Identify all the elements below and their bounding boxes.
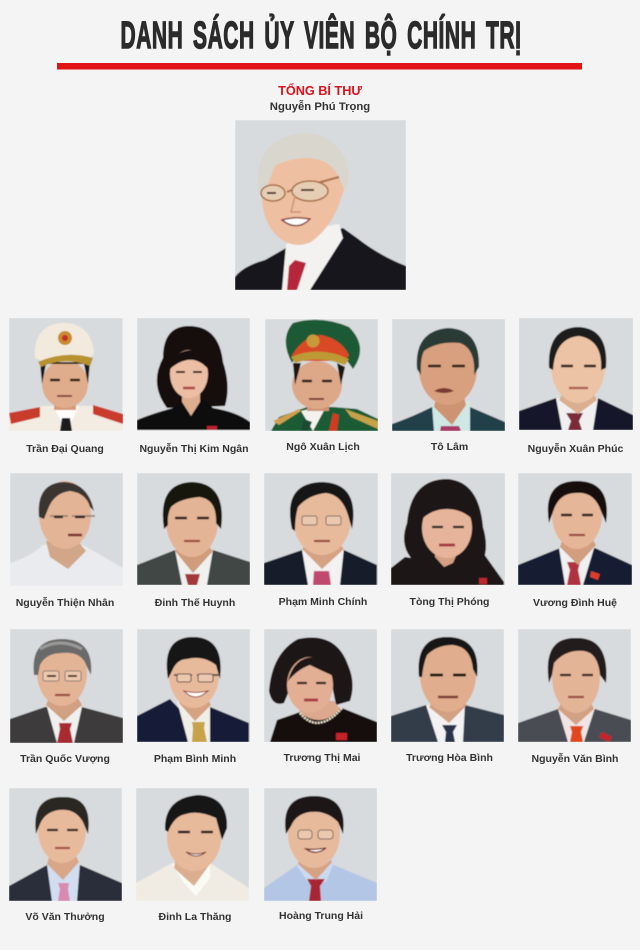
portrait: Trương Hòa Bình — [391, 629, 504, 742]
name: Phạm Minh Chính: Phạm Minh Chính — [279, 596, 367, 608]
name: Hoàng Trung Hải: Hoàng Trung Hải — [279, 910, 363, 922]
member: Nguyễn Thị Kim Ngân — [137, 318, 250, 455]
portrait: Nguyễn Văn Bình — [518, 629, 631, 742]
portrait: Tòng Thị Phóng — [391, 473, 505, 585]
portrait: Tô Lâm — [392, 319, 505, 431]
portrait: Nguyễn Phú Trọng — [235, 120, 406, 290]
member: Nguyễn Xuân Phúc — [519, 318, 633, 455]
portrait: Vương Đình Huệ — [518, 473, 632, 585]
portrait: Trần Đại Quang — [9, 318, 123, 431]
name: Tòng Thị Phóng: Tòng Thị Phóng — [410, 596, 489, 608]
portrait: Trương Thị Mai — [264, 629, 377, 742]
portrait: Nguyễn Thiện Nhân — [10, 473, 123, 586]
member: Tô Lâm — [392, 319, 505, 453]
name: Ngô Xuân Lịch: Ngô Xuân Lịch — [286, 441, 360, 453]
name: Trương Thị Mai: Trương Thị Mai — [284, 752, 361, 764]
name: Trương Hòa Bình: Trương Hòa Bình — [406, 752, 493, 764]
role heading: TỔNG BÍ THƯ — [278, 83, 362, 98]
portrait: Nguyễn Xuân Phúc — [519, 318, 633, 430]
name: Đinh La Thăng: Đinh La Thăng — [159, 911, 231, 923]
member: Nguyễn Thiện Nhân — [10, 473, 123, 609]
name: Trần Đại Quang: Trần Đại Quang — [26, 443, 104, 455]
name: Phạm Bình Minh: Phạm Bình Minh — [154, 753, 236, 765]
portrait: Ngô Xuân Lịch — [265, 319, 378, 431]
red divider bar — [57, 63, 582, 70]
name: Tô Lâm: Tô Lâm — [431, 441, 468, 453]
portrait: Võ Văn Thưởng — [9, 788, 122, 901]
member: Vương Đình Huệ — [518, 473, 632, 609]
member: Võ Văn Thưởng — [9, 788, 122, 923]
member: Tòng Thị Phóng — [391, 473, 505, 608]
member: Trương Hòa Bình — [391, 629, 504, 764]
general secretary name: Nguyễn Phú Trọng — [270, 100, 370, 113]
member: Hoàng Trung Hải — [264, 788, 377, 922]
member: Ngô Xuân Lịch — [265, 319, 378, 453]
portrait: Hoàng Trung Hải — [264, 788, 377, 901]
name: Nguyễn Thị Kim Ngân: Nguyễn Thị Kim Ngân — [139, 442, 249, 455]
name: Trần Quốc Vượng: Trần Quốc Vượng — [20, 753, 110, 765]
portrait: Đinh Thế Huynh — [137, 473, 250, 585]
general secretary block — [235, 83, 406, 290]
member: Trần Đại Quang — [9, 318, 123, 455]
name: Nguyễn Thiện Nhân: Nguyễn Thiện Nhân — [16, 596, 114, 609]
name: Võ Văn Thưởng: Võ Văn Thưởng — [25, 911, 105, 923]
portrait: Phạm Minh Chính — [264, 473, 378, 585]
portrait: Phạm Bình Minh — [137, 629, 250, 742]
member: Nguyễn Văn Bình — [518, 629, 631, 765]
name: Vương Đình Huệ: Vương Đình Huệ — [533, 597, 617, 609]
portrait: Nguyễn Thị Kim Ngân — [137, 318, 250, 430]
portrait: Đinh La Thăng — [136, 788, 249, 901]
name: Nguyễn Xuân Phúc: Nguyễn Xuân Phúc — [528, 442, 623, 455]
member: Đinh La Thăng — [136, 788, 249, 923]
member: Phạm Minh Chính — [264, 473, 378, 608]
member: Trần Quốc Vượng — [10, 629, 123, 765]
name: Nguyễn Văn Bình: Nguyễn Văn Bình — [532, 752, 618, 765]
portrait: Trần Quốc Vượng — [10, 629, 123, 743]
member: Đinh Thế Huynh — [137, 473, 250, 609]
member: Trương Thị Mai — [264, 629, 377, 764]
name: Đinh Thế Huynh: Đinh Thế Huynh — [155, 597, 235, 609]
member: Phạm Bình Minh — [137, 629, 250, 765]
